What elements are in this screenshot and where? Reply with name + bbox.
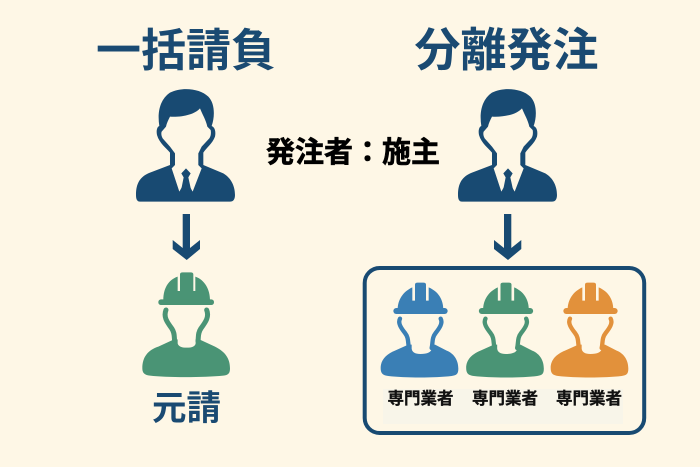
icon: worker green bbox=[466, 283, 544, 377]
title: 分離発注: 分離発注 bbox=[414, 24, 598, 76]
label: 発注者:施主: 発注者：施主 bbox=[266, 129, 440, 171]
label: 元請: 元請 bbox=[152, 390, 221, 428]
panel frame bbox=[365, 268, 644, 433]
arrow: right bbox=[494, 214, 521, 260]
icon: worker orange bbox=[551, 283, 628, 377]
label: 専門業者 2: 専門業者 bbox=[472, 389, 538, 408]
panel: specialist contractors bbox=[365, 268, 644, 433]
icon: client left bbox=[136, 89, 235, 202]
label backdrop bbox=[383, 389, 623, 424]
arrow: left bbox=[173, 214, 200, 260]
title: 一括請負: 一括請負 bbox=[96, 25, 276, 76]
icon: prime contractor bbox=[142, 272, 230, 377]
label: 専門業者 3: 専門業者 bbox=[556, 389, 622, 408]
label: 専門業者 1: 専門業者 bbox=[388, 389, 454, 408]
icon: client right bbox=[458, 89, 557, 202]
icon: worker blue bbox=[381, 283, 458, 377]
